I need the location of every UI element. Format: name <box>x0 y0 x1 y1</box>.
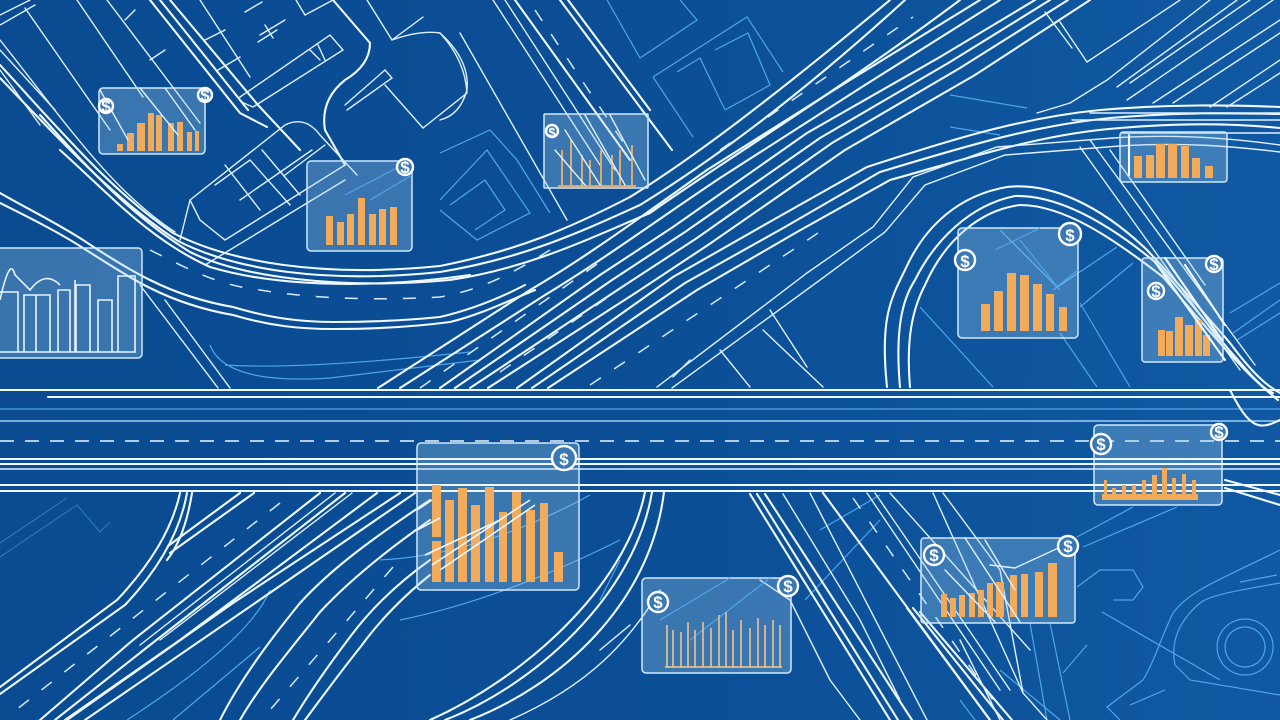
road: diagonal bundles <box>378 0 1280 388</box>
panel: right narrow chart: $ <box>1151 282 1161 301</box>
panel: highway large chart <box>417 443 579 590</box>
panel: highway right chart: $ <box>1214 423 1224 442</box>
panel: lower-right chart: $ <box>1063 537 1073 556</box>
panel: right narrow chart: $ <box>1209 255 1219 274</box>
road: top-center road <box>460 0 672 220</box>
road: ring ramp <box>885 186 1280 400</box>
panel: right large chart <box>955 223 1081 338</box>
panel: highway right chart <box>1091 423 1227 505</box>
panel: bottom-center chart: $ <box>653 593 663 612</box>
panel: top-center chart: $ <box>548 125 556 140</box>
top-left building plan <box>0 0 467 265</box>
panel: top-right chart <box>1120 132 1227 182</box>
panel: top-center chart <box>544 114 648 188</box>
panel: highway right chart: $ <box>1096 435 1106 454</box>
main highway <box>0 390 1280 491</box>
road: lower curved bundle <box>0 193 550 388</box>
panel: top-left chart <box>99 86 212 154</box>
road: upper curved bundle <box>0 0 960 284</box>
panel: lower-right chart <box>921 536 1078 623</box>
panel: center-left chart <box>307 158 413 251</box>
panel: left skyline chart <box>0 248 142 358</box>
panel: center-left chart: $ <box>400 158 410 177</box>
panel: top-left chart: $ <box>101 97 111 116</box>
panel: right large chart: $ <box>1065 226 1075 245</box>
panel: highway large chart: $ <box>559 450 569 469</box>
panel: top-left chart: $ <box>200 86 210 105</box>
panel: right narrow chart <box>1142 255 1225 362</box>
panel: bottom-center chart: $ <box>783 577 793 596</box>
panel: lower-right chart: $ <box>929 546 939 565</box>
lower roads <box>0 390 1280 720</box>
panel: bottom-center chart <box>642 576 798 673</box>
panel: right large chart: $ <box>960 252 970 271</box>
